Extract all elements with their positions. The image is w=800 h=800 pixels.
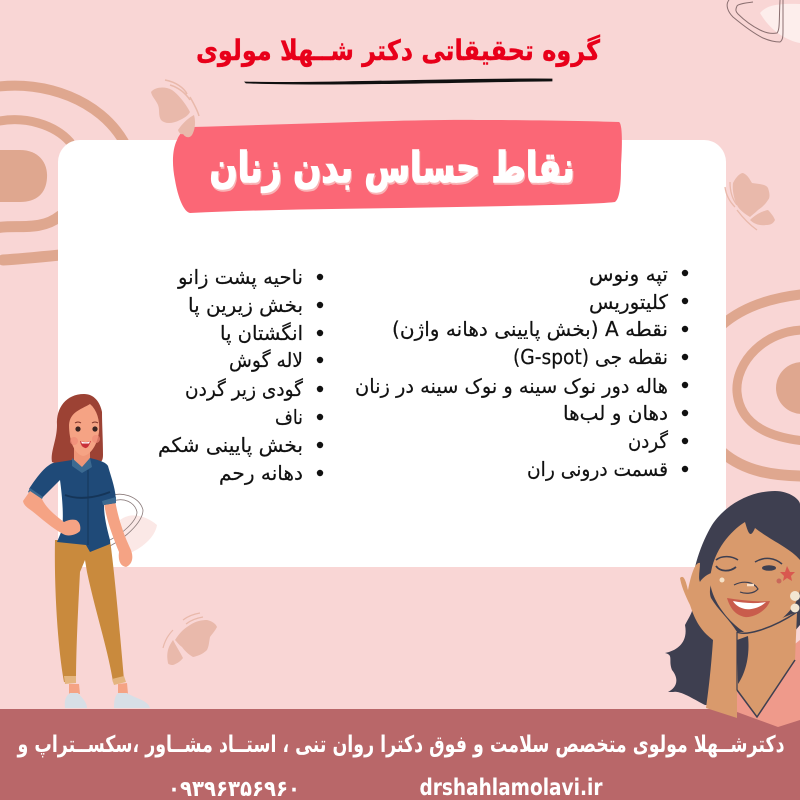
pants	[55, 540, 124, 682]
footer band	[0, 709, 800, 800]
list: right column: قسمت درونی ران	[527, 457, 668, 481]
title: گروه تحقیقاتی دکتر شــهلا مولوی	[196, 34, 601, 67]
heading banner: نقاط حساس بدن زنان	[210, 143, 574, 192]
decoration: butterfly top-left	[151, 80, 199, 137]
list: right column: نقطه A (بخش پایینی دهانه واژن)	[392, 317, 668, 342]
list: right column: هاله دور نوک سینه و نوک سینه در زنان	[355, 374, 668, 398]
title underline	[245, 79, 552, 84]
right arm	[104, 500, 132, 567]
list: right column: کلیتوریس	[589, 290, 668, 314]
list: right column	[355, 262, 688, 481]
decoration: right concentric arcs	[722, 294, 800, 476]
heading banner	[173, 120, 622, 213]
list: left column: دهانه رحم	[219, 461, 303, 485]
list: right column: نقطه جی (G-spot)	[513, 345, 668, 369]
decoration: top-left concentric arcs	[0, 86, 124, 260]
illustration: standing woman	[23, 394, 150, 708]
list: left column: لاله گوش	[229, 348, 303, 372]
panel: white card	[58, 140, 726, 567]
shirt	[29, 458, 116, 552]
list: left column	[158, 265, 323, 485]
illustration: smiling woman	[665, 491, 800, 727]
decoration: top-right outline triangle	[727, 0, 800, 43]
list: left column: بخش پایینی شکم	[158, 433, 303, 458]
heading banner: نقاط حساس بدن زنان	[210, 145, 576, 194]
list: left column: ناف	[275, 405, 303, 429]
list: right column: دهان و لب‌ها	[563, 401, 668, 425]
face details	[716, 557, 782, 564]
shoes	[69, 683, 128, 694]
left arm with hand on hip	[23, 491, 80, 535]
list: left column: ناحیه پشت زانو	[177, 265, 303, 290]
list: right column: تپه ونوس	[589, 262, 668, 287]
decoration: butterfly bottom	[163, 613, 217, 665]
decoration: outline shape beside left figure	[110, 494, 157, 555]
list: left column: بخش زیرین پا	[188, 293, 303, 318]
list: left column: انگشتان پا	[220, 321, 303, 346]
list: right column: گردن	[628, 429, 668, 453]
list: left column: گودی زیر گردن	[185, 377, 303, 401]
decoration: butterfly right	[725, 173, 775, 230]
